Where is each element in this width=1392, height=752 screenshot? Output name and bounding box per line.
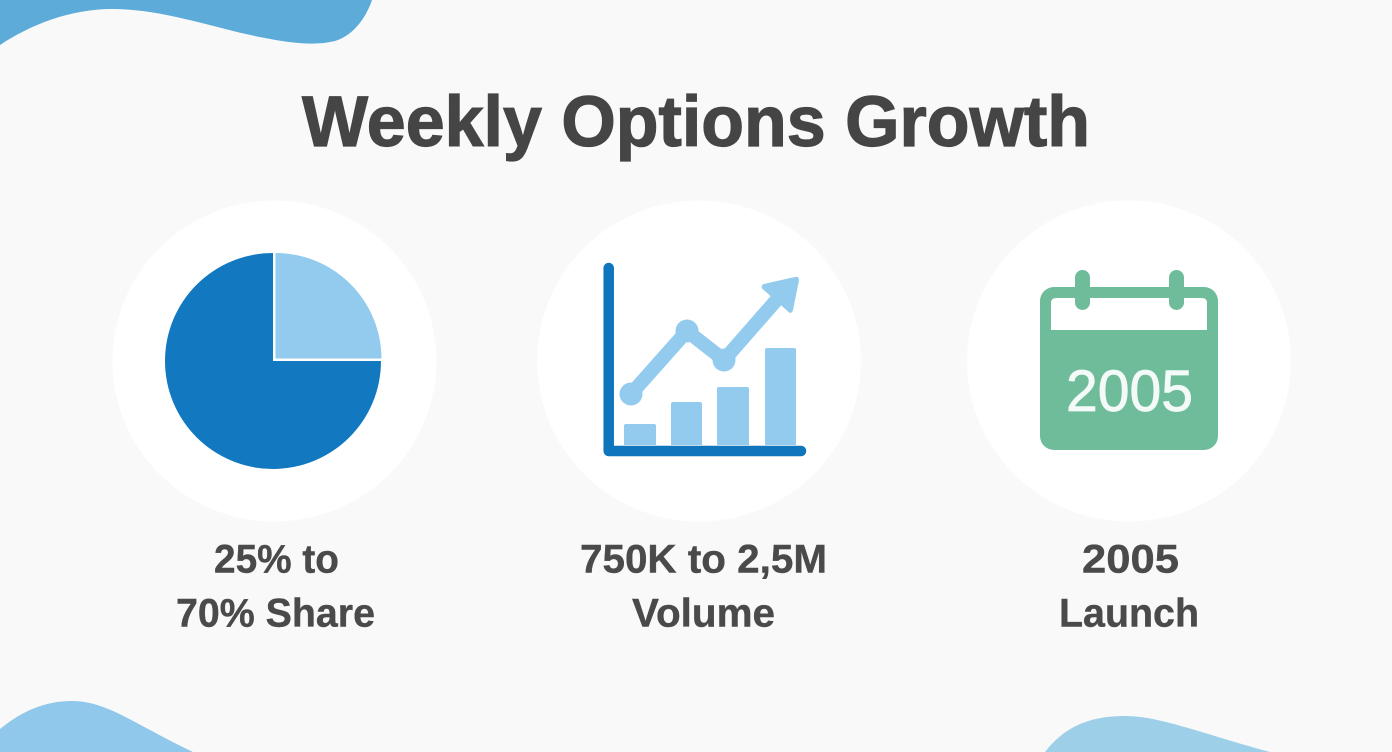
circle background: launch year: [967, 200, 1291, 522]
panel: volume: [537, 200, 861, 636]
label: launch year: Launch: [1059, 592, 1199, 636]
label: volume: 750K to 2,5M: [580, 538, 827, 582]
title: Weekly Options Growth: [302, 83, 1090, 162]
label: launch year: 2005: [1082, 538, 1179, 582]
bars: [624, 348, 796, 445]
decorative wave: bottom right: [1045, 716, 1270, 752]
trend line with arrow: [620, 278, 798, 406]
circle background: market share: [112, 200, 436, 522]
axes: [609, 268, 801, 451]
panel: launch year: [967, 200, 1291, 636]
label: volume: [580, 538, 827, 636]
decorative wave: top left: [0, 0, 372, 45]
label: volume: Volume: [632, 592, 775, 636]
label: market share: 25% to: [214, 538, 339, 582]
icon: calendar: [1040, 270, 1218, 450]
panel: market share: [112, 200, 436, 636]
decorative wave: bottom left: [0, 701, 193, 752]
label: launch year: [1059, 538, 1199, 636]
icon: calendar: 2005: [1066, 359, 1193, 424]
label: market share: [176, 538, 375, 636]
icon: pie chart: [165, 253, 382, 469]
icon: growth chart: [609, 268, 801, 451]
label: market share: 70% Share: [176, 592, 375, 636]
circle background: volume: [537, 200, 861, 522]
